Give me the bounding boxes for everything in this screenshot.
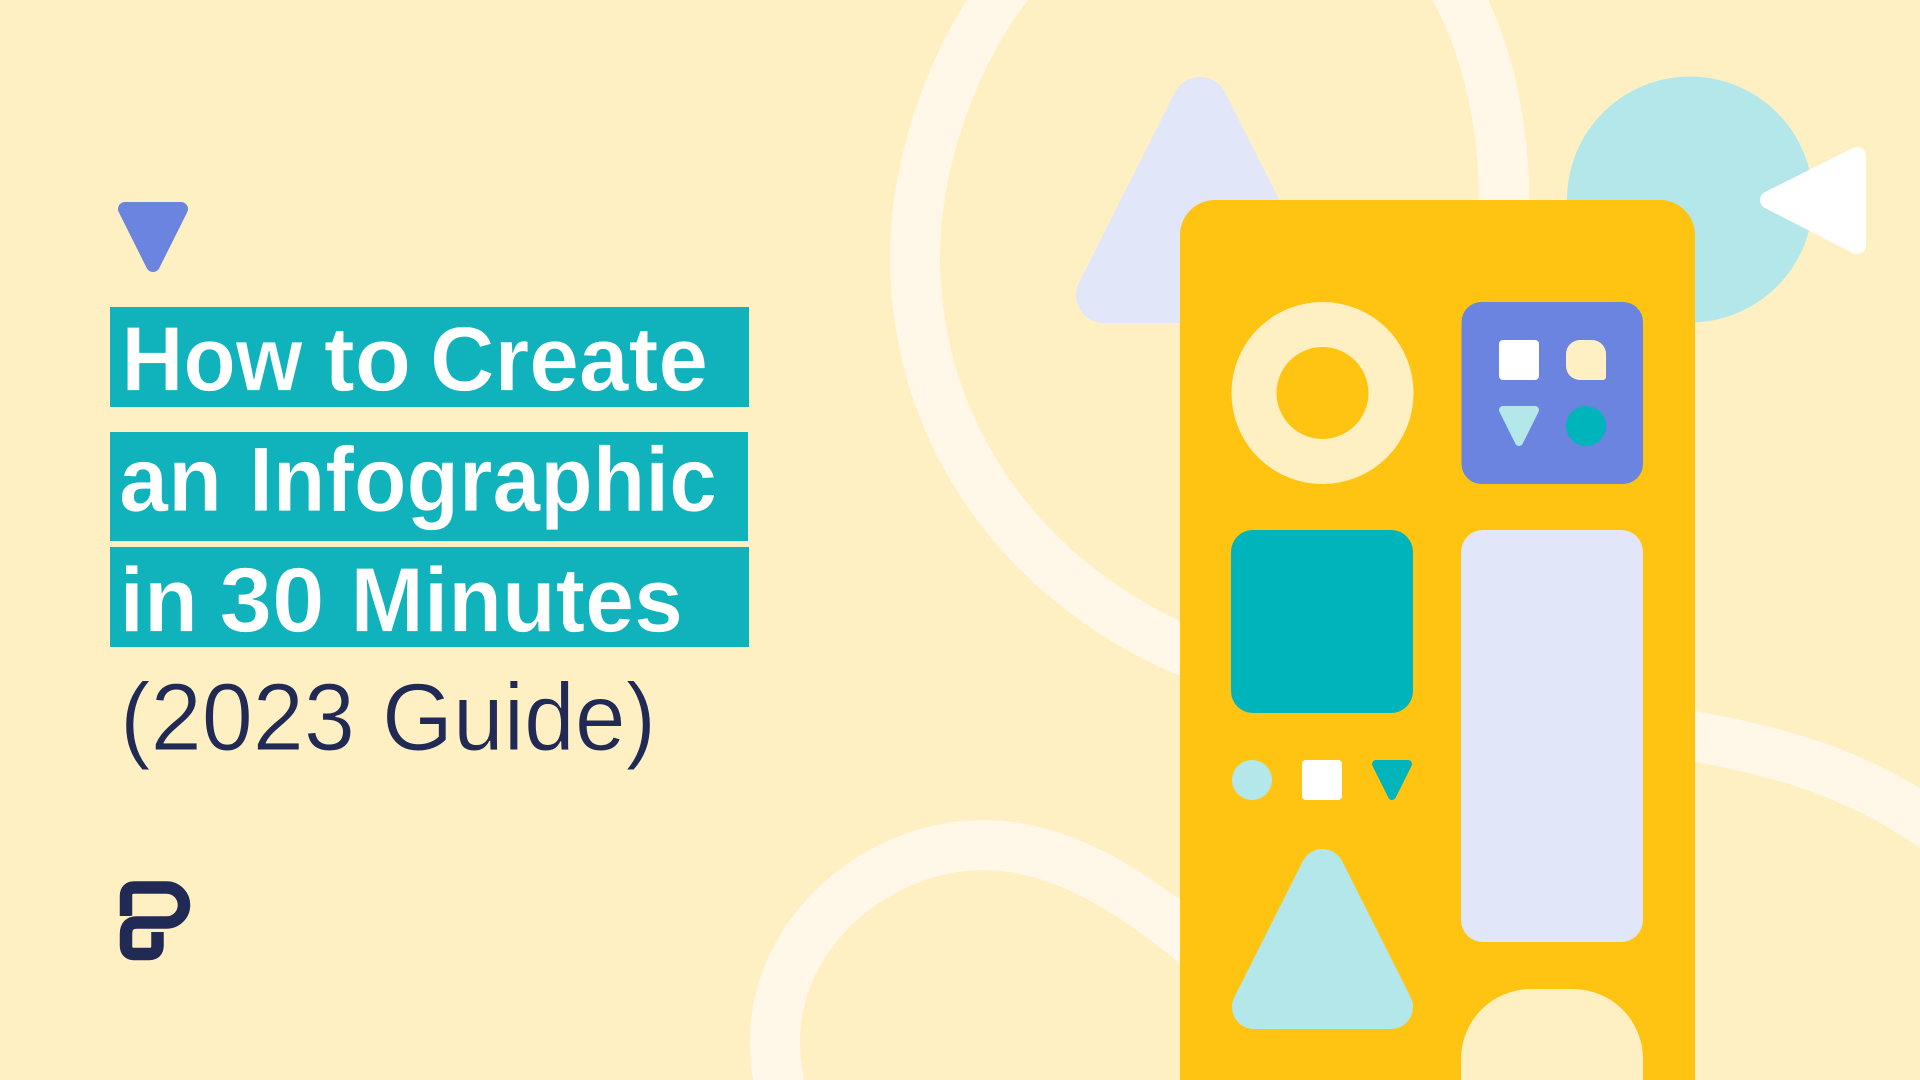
title line 1: How	[122, 308, 303, 410]
title line 2: Infographic	[249, 429, 717, 531]
back shape: lavender triangle	[1104, 105, 1296, 295]
panel: yellow board	[1180, 200, 1695, 1080]
icon: teal triangle	[1376, 764, 1408, 796]
tile: blue shape palette	[1462, 302, 1643, 484]
icon: light teal triangle	[1503, 410, 1535, 442]
icon: blue triangle marker	[125, 209, 181, 265]
title line 1: to	[324, 308, 411, 410]
tile: cream arch	[1461, 989, 1643, 1080]
icon: light teal circle	[1232, 760, 1272, 800]
tile: teal square	[1231, 530, 1413, 713]
logo	[126, 888, 184, 954]
subtitle: (2023	[120, 664, 355, 771]
title line 1: Create	[430, 308, 708, 410]
subtitle: Guide)	[382, 664, 656, 771]
subtitle	[120, 664, 656, 771]
back shape: light teal circle	[1567, 76, 1813, 322]
icon: large light teal triangle	[1254, 871, 1391, 1007]
title line 3: in	[120, 550, 198, 652]
icon: teal circle	[1566, 406, 1606, 446]
icon: ring	[1254, 324, 1391, 462]
icon: white square	[1302, 760, 1342, 800]
title line 2: an	[119, 429, 222, 531]
title line 1	[110, 307, 749, 410]
title line 3: Minutes	[350, 550, 683, 652]
background curves	[775, 0, 1920, 1080]
icon: white square	[1499, 340, 1539, 380]
back shape: white triangle	[1769, 156, 1857, 245]
tile: lavender rectangle	[1461, 530, 1643, 942]
icon: cream rounded square	[1566, 340, 1606, 380]
title line 3	[110, 547, 749, 652]
title line 3: 30	[220, 550, 324, 652]
